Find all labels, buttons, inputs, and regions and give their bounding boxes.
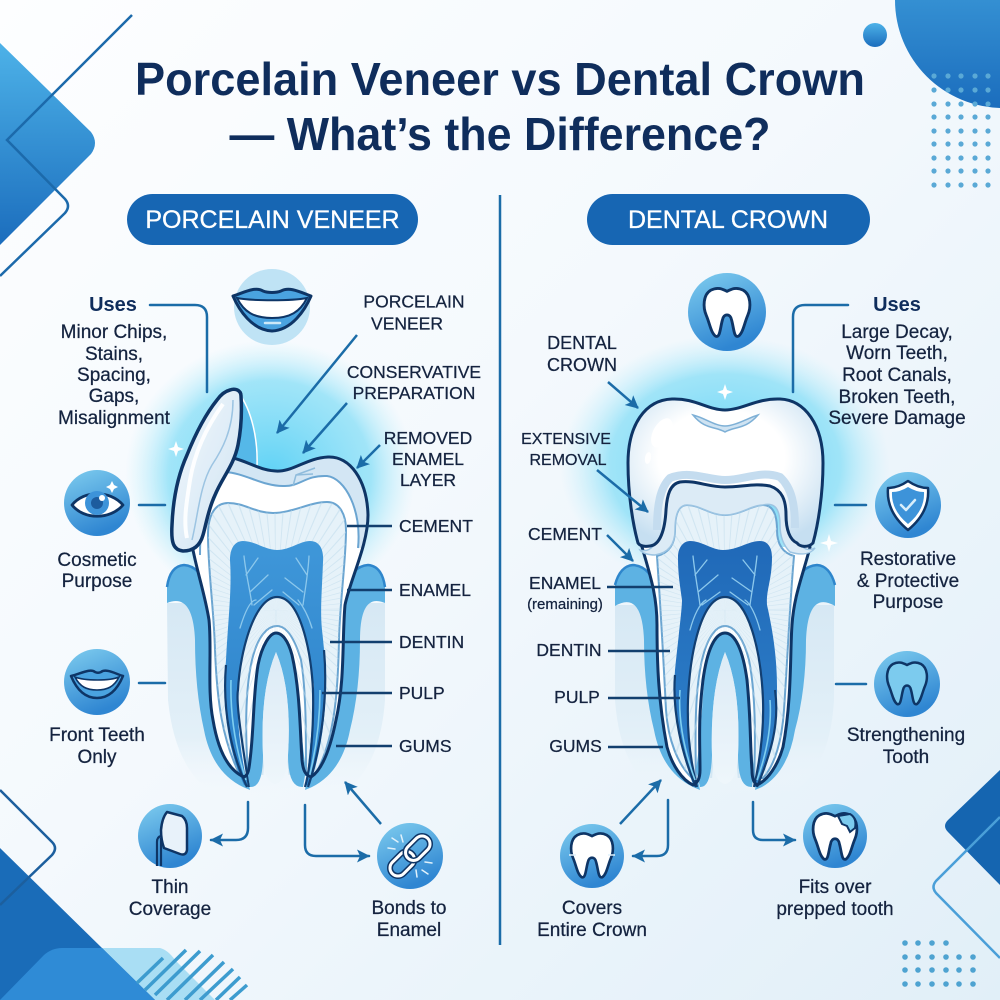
title (135, 53, 865, 160)
sparkle (168, 441, 184, 457)
label: cement: CEMENT (528, 524, 602, 544)
callouts: crown layers: PULP (554, 687, 600, 707)
tooth diagram: crown (560, 335, 890, 795)
callouts: veneer layers (322, 516, 473, 756)
heading pill: porcelain veneer (127, 194, 418, 245)
connector lips (139, 682, 165, 684)
tooth outline (193, 457, 368, 777)
left uses block (58, 294, 171, 429)
removed enamel band (230, 458, 366, 548)
uses connector right (793, 305, 848, 392)
label: restorative: & Protective (857, 571, 959, 592)
title: — What’s the Difference? (230, 108, 770, 160)
icon: broken tooth (803, 804, 867, 868)
glow (125, 340, 415, 610)
pulp (674, 541, 777, 787)
arrow: covers left (633, 800, 668, 856)
callouts: crown layers: ENAMEL (529, 573, 601, 593)
label: strengthening (847, 725, 965, 768)
icon: covers crown (560, 824, 624, 888)
right uses block (828, 294, 966, 429)
label: conservative preparation: CONSERVATIVE (347, 362, 481, 382)
label: bonds to enamel (372, 898, 446, 941)
label: front teeth only: Only (77, 747, 117, 768)
callouts: veneer layers: PULP (399, 683, 445, 703)
label: covers entire crown: Covers (562, 898, 622, 919)
arrow: removed (357, 445, 380, 468)
arrow: crown (608, 382, 638, 408)
dentin (656, 505, 796, 779)
bottom-right decoration (902, 770, 1000, 987)
label: extensive removal: REMOVAL (529, 452, 607, 469)
right uses block: Worn Teeth, (846, 343, 948, 364)
gums (615, 565, 835, 795)
connector eye (139, 504, 165, 506)
label: porcelain veneer: PORCELAIN (363, 292, 465, 312)
left uses block: Stains, (85, 344, 143, 365)
top-right decoration (863, 0, 1000, 188)
callouts: crown layers: (remaining) (527, 596, 603, 613)
label: conservative preparation: PREPARATION (353, 383, 475, 403)
sparkle near crown (820, 534, 838, 552)
label: extensive removal: EXTENSIVE (521, 431, 611, 448)
dentin (207, 501, 347, 776)
label: removed enamel layer: REMOVED (384, 428, 472, 448)
connector tooth (836, 683, 866, 685)
label: restorative: Purpose (873, 592, 943, 613)
right uses block: Uses (873, 294, 921, 316)
heading pill: porcelain veneer: PORCELAIN VENEER (145, 206, 400, 234)
label: cosmetic purpose (57, 550, 137, 592)
bottom-left decoration (0, 790, 247, 1000)
callouts: veneer layers: CEMENT (399, 516, 473, 536)
label: covers entire crown: Entire Crown (537, 920, 647, 941)
callouts: crown layers: GUMS (549, 736, 602, 756)
left uses block: Minor Chips, (61, 322, 167, 343)
uses connector left (150, 305, 207, 392)
connector shield (835, 504, 866, 506)
crown cap (628, 399, 823, 546)
label: cosmetic purpose: Purpose (62, 571, 132, 592)
crown details (693, 415, 758, 432)
root outline (642, 547, 810, 785)
label: fits over prepped tooth (776, 877, 894, 920)
prepared stump band (640, 474, 815, 555)
crown outline (628, 399, 823, 546)
arrow: covers up (620, 780, 661, 824)
callouts: veneer layers: DENTIN (399, 632, 464, 652)
label: fits over prepped tooth: Fits over (799, 877, 872, 898)
label: dental crown: CROWN (547, 355, 617, 375)
label: thin coverage: Thin (152, 877, 188, 898)
icon: eye (64, 470, 130, 536)
callouts: veneer layers: ENAMEL (399, 580, 471, 600)
old tooth lobe behind veneer (230, 392, 257, 466)
arrow: cement (607, 535, 633, 561)
label: covers entire crown (537, 898, 647, 941)
right uses block: Large Decay, (841, 322, 953, 343)
label: strengthening: Strengthening (847, 725, 965, 746)
label: porcelain veneer: VENEER (371, 314, 443, 334)
pulp (225, 541, 326, 787)
tooth diagram: veneer (125, 340, 415, 795)
label: bonds to enamel: Enamel (377, 920, 441, 941)
veneer shell (172, 389, 241, 551)
left uses block: Uses (89, 294, 137, 316)
arrow: removal (597, 470, 648, 512)
top-left decoration (0, 15, 132, 276)
tooth body (193, 457, 368, 777)
left uses block: Misalignment (58, 408, 171, 429)
right uses block: Broken Teeth, (839, 387, 955, 408)
arrow: veneer (277, 335, 357, 433)
title: Porcelain Veneer vs Dental Crown (135, 53, 865, 105)
label: bonds to enamel: Bonds to (372, 898, 446, 919)
label: thin coverage (129, 877, 211, 920)
heading pill: dental crown: DENTAL CROWN (628, 206, 828, 234)
icon: lips (64, 649, 130, 715)
left uses block: Spacing, (77, 365, 151, 386)
icon: veneer shell (138, 804, 202, 868)
sparkles (717, 384, 733, 400)
callouts: veneer layers: GUMS (399, 736, 452, 756)
callouts: crown layers: DENTIN (536, 640, 602, 660)
arrow: thin coverage (211, 802, 248, 840)
label: fits over prepped tooth: prepped tooth (776, 899, 894, 920)
icon: shield (875, 472, 941, 538)
center divider (499, 195, 501, 945)
left uses block: Gaps, (89, 386, 139, 407)
root body (642, 547, 810, 785)
arrow: bonds (305, 805, 369, 856)
crown inner band (657, 475, 795, 530)
arrow: gum pointer (345, 782, 381, 824)
right uses block: Root Canals, (842, 365, 952, 386)
icon: lips top (233, 269, 311, 345)
right uses block: Severe Damage (828, 408, 966, 429)
label: front teeth only: Front Teeth (49, 725, 145, 746)
icon: tooth top (688, 273, 766, 351)
arrow: preparation (303, 403, 347, 453)
label: dental crown: DENTAL (547, 333, 617, 353)
label: cosmetic purpose: Cosmetic (57, 550, 137, 571)
glow (560, 335, 890, 595)
gums (167, 565, 385, 795)
label: thin coverage: Coverage (129, 899, 211, 920)
center gum (696, 633, 754, 787)
label: restorative (857, 549, 959, 613)
label: restorative: Restorative (860, 549, 956, 570)
heading pill: dental crown (587, 194, 870, 245)
icon: chain (377, 823, 443, 889)
callouts: crown layers (527, 573, 680, 756)
arrow: fits (753, 802, 795, 840)
center gum (247, 633, 306, 787)
label: removed enamel layer: ENAMEL (392, 449, 464, 469)
label: removed enamel layer: LAYER (400, 470, 456, 490)
label: front teeth only (49, 725, 145, 768)
label: strengthening: Tooth (883, 747, 929, 768)
icon: tooth strengthening (874, 651, 940, 717)
